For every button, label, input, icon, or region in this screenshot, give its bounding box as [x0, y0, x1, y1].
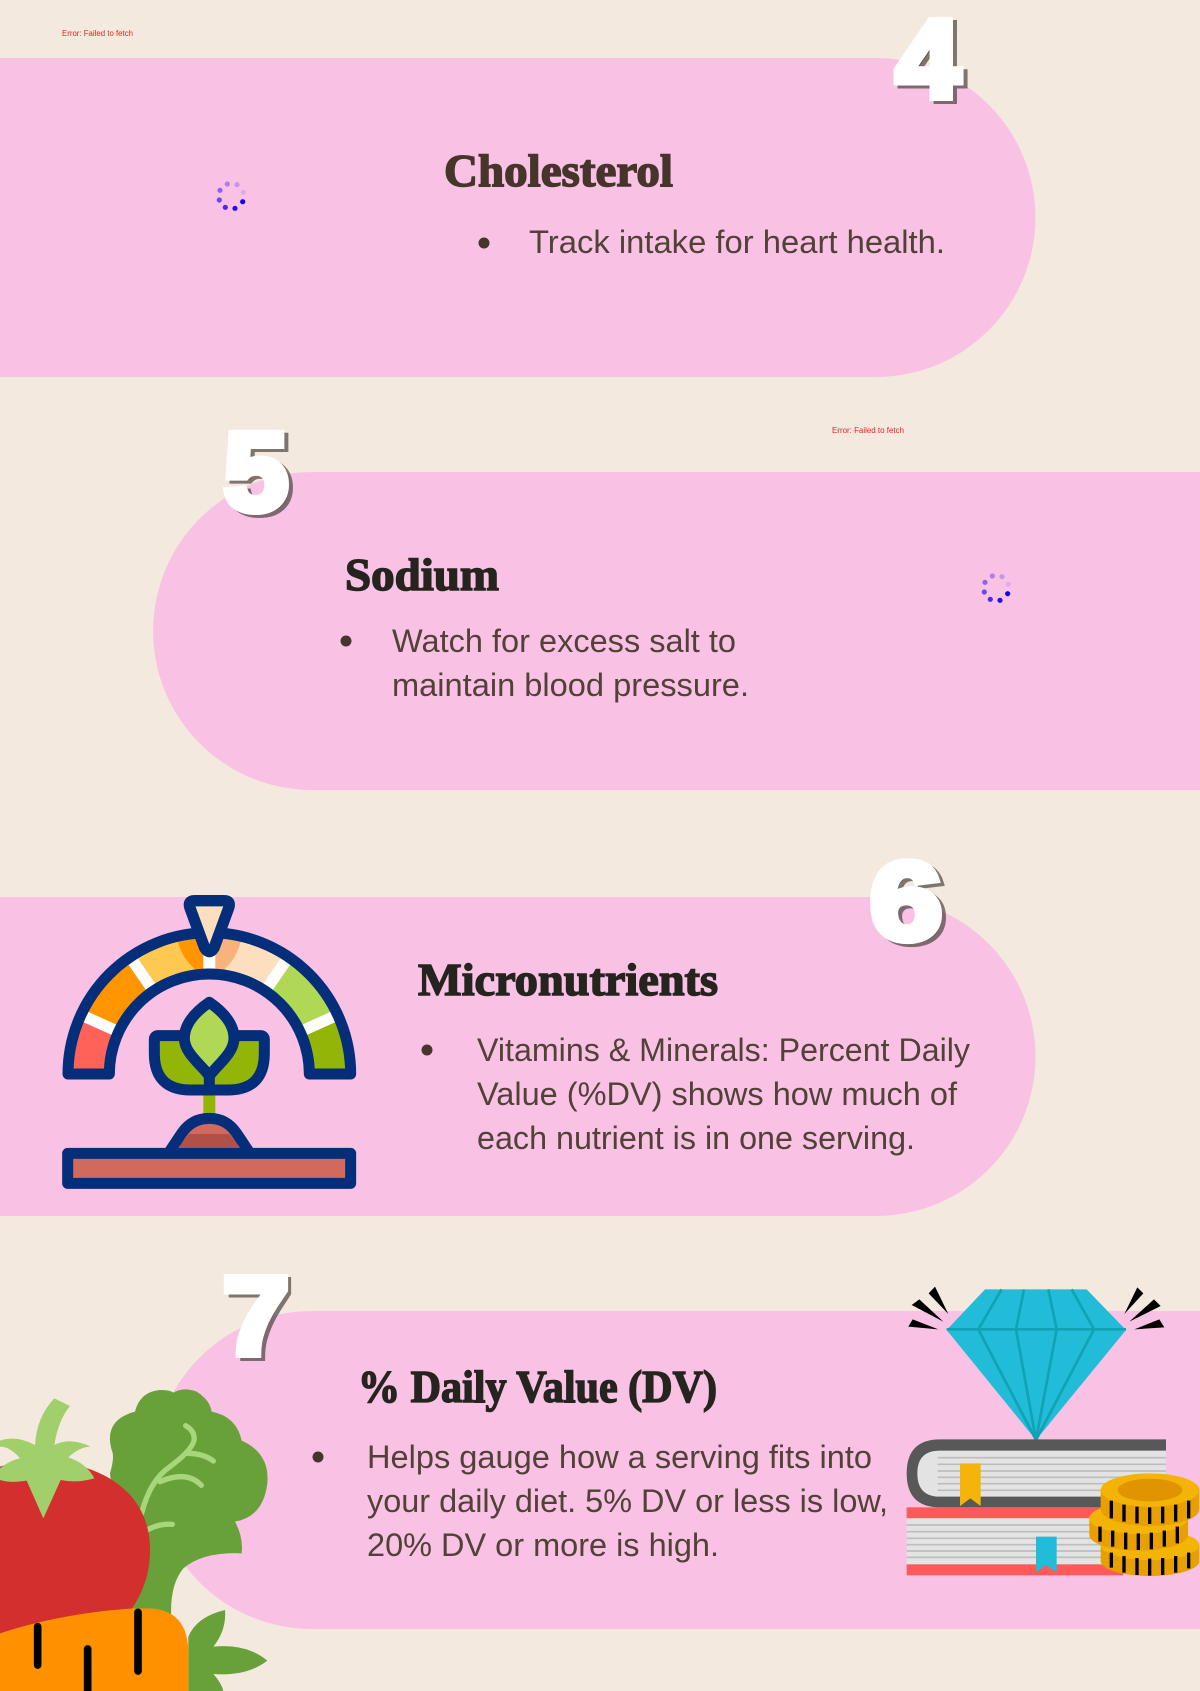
bullet text: daily value: 20% DV or more is high.: [367, 1527, 719, 1563]
icon: sparkles: [908, 1287, 1164, 1329]
icon: carrot: [0, 1608, 267, 1691]
bullet text: daily value: Helps gauge how a serving fits into: [367, 1439, 872, 1475]
loading spinner 1: [217, 181, 246, 211]
number 4: 4: [896, 0, 960, 121]
bullet text: micronutrients: Vitamins & Minerals: Percent Daily: [477, 1032, 970, 1068]
number 5: 5: [228, 414, 292, 537]
panel: micronutrients: [0, 840, 1036, 1216]
bullet text: micronutrients: [422, 1032, 970, 1156]
number 4: 4: [900, 1, 964, 124]
loading spinner 2: [982, 573, 1011, 603]
number 6: 6: [874, 843, 946, 966]
heading: cholesterol: Cholesterol: [444, 145, 673, 196]
error message 1: Error: Failed to fetch: [62, 29, 133, 38]
heading: micronutrients: Micronutrients: [418, 954, 718, 1005]
icon: lettuce: [110, 1389, 268, 1623]
panel: cholesterol: [0, 0, 1035, 377]
bullet text: micronutrients: Value (%DV) shows how much of: [477, 1076, 957, 1112]
number 7: 7: [223, 1255, 289, 1378]
panel: sodium: [153, 411, 1200, 790]
bullet text: sodium: Watch for excess salt to: [392, 623, 736, 659]
bullet text: sodium: maintain blood pressure.: [392, 667, 749, 703]
number 7: 7: [228, 1258, 292, 1381]
illustration: diamond on books with coins: [907, 1287, 1199, 1576]
number 6: 6: [870, 840, 942, 963]
icon: coins: [1089, 1473, 1199, 1576]
bullet text: daily value: [312, 1439, 888, 1563]
number 5: 5: [224, 411, 288, 534]
icon: books: [907, 1439, 1166, 1575]
heading: sodium: Sodium: [345, 549, 499, 600]
bullet text: daily value: your daily diet. 5% DV or less is low,: [367, 1483, 888, 1519]
icon: plant gauge: [58, 901, 360, 1183]
bullet text: micronutrients: each nutrient is in one serving.: [477, 1120, 915, 1156]
icon: tomato: [0, 1398, 150, 1637]
icon: diamond: [947, 1289, 1126, 1440]
bullet text: cholesterol: Track intake for heart health.: [529, 224, 945, 260]
panel: daily value: [153, 1255, 1200, 1629]
error message 2: Error: Failed to fetch: [832, 426, 904, 435]
bullet text: sodium: [340, 623, 749, 703]
illustration: vegetables: [0, 1389, 268, 1691]
heading: daily value: % Daily Value (DV): [358, 1361, 717, 1412]
